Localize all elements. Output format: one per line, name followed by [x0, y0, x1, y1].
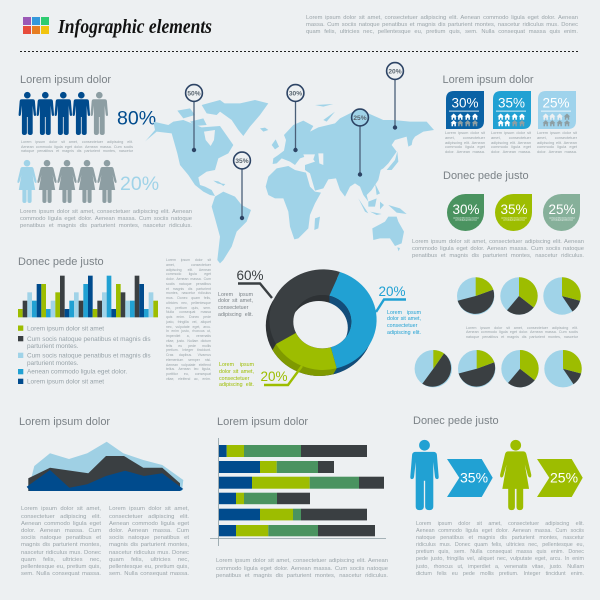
text column left — [21, 506, 101, 579]
drop: 25%: commodo ligula eget dolor aenean — [551, 218, 573, 222]
20% green label: adipiscing elit. — [219, 382, 254, 388]
heading: Lorem ipsum dolor — [217, 416, 308, 428]
drops caption: Lorem ipsum dolor sit amet, consectetuer adipiscing elit. Aenean — [412, 239, 584, 245]
drop: 30%: commodo ligula eget dolor aenean — [455, 218, 477, 222]
caption: pede justo, fringilla vel, aliquet nec, vulputate eget, arcu. In enim — [416, 556, 584, 562]
text column left: magnis dis parturient montes, — [21, 542, 101, 548]
men caption — [21, 140, 133, 155]
caption: justo, rhoncus ut, imperdiet a, venenatis vitae, justo. Nullam — [416, 564, 584, 570]
men caption: Lorem ipsum dolor sit amet, consectetuer adipiscing elit. — [21, 140, 133, 144]
arrow: 35% — [447, 459, 493, 497]
women caption — [20, 209, 192, 232]
card caption 2 — [491, 131, 531, 156]
narrow text column: dolor. Aenean massa. Cum — [166, 277, 211, 281]
intro text: quam felis, ultricies nec, pellentesque eu, pretium quis, sem. Nulla consequat massa quis enim. — [306, 29, 578, 35]
narrow text column — [166, 258, 211, 383]
text column left: dolor. Aenean massa. Cum — [21, 528, 101, 534]
20% blue label: 20% — [378, 284, 406, 299]
drop: 25% — [543, 194, 580, 231]
stacked bar chart — [210, 438, 386, 546]
panel: pie charts — [415, 277, 582, 387]
card caption 3: amet, consectetuer — [537, 135, 577, 140]
pin: 25% — [352, 109, 368, 177]
narrow text column: sociis natoque penatibus — [166, 282, 211, 286]
panel: area chart — [19, 416, 189, 579]
drop: 30%: Lorem ipsum dolor sit amet, consectetuer — [453, 216, 479, 220]
narrow text column: Cras dapibus. Vivamus — [166, 353, 211, 357]
americas — [145, 100, 268, 263]
narrow text column: vitae, eleifend ac, enim. — [166, 377, 211, 381]
pin: 30% — [287, 85, 304, 152]
narrow text column: tellus. Aenean leo ligula, — [166, 367, 211, 371]
text column right: quam felis, ultricies nec, — [109, 557, 189, 563]
card: 35%: 35% — [498, 96, 525, 111]
text column right: Aenean commodo ligula eget — [109, 521, 189, 527]
drop: 25%: 25% — [548, 202, 576, 217]
heading: Donec pede justo — [18, 256, 104, 268]
drop: 35% — [495, 194, 532, 231]
pie row top — [457, 277, 581, 315]
text column left: pellentesque eu, pretium quis, — [21, 564, 101, 570]
heading: Donec pede justo — [443, 170, 529, 182]
20% green label: dolor sit amet, — [219, 369, 254, 375]
narrow text column: Nulla consequat massa — [166, 310, 211, 314]
intro text — [306, 15, 578, 38]
legend: Lorem ipsum dolor sit amet — [27, 326, 104, 333]
60% label: Lorem ipsum — [218, 292, 253, 298]
narrow text column: Aenean vulputate eleifend — [166, 362, 211, 366]
text column right: consectetuer adipiscing elit. — [109, 514, 189, 520]
pie caption: Aenean commodo ligula eget dolor. Aenean massa. Cum sociis — [466, 330, 578, 334]
drops caption: commodo ligula eget dolor. Aenean massa. Cum sociis natoque — [412, 246, 584, 252]
header — [23, 15, 578, 38]
panel: gender split — [410, 415, 584, 581]
card caption 3: dolor. Aenean massa. — [537, 149, 577, 154]
legend — [18, 326, 151, 386]
drop: 35%: commodo ligula eget dolor aenean — [503, 218, 525, 222]
narrow text column: elementum semper nisi. — [166, 358, 211, 362]
narrow text column: imperdiet a, venenatis — [166, 334, 211, 338]
drop: 35%: 35% — [500, 202, 528, 217]
women caption: Lorem ipsum dolor sit amet, consectetuer adipiscing elit. Aenean — [20, 209, 192, 215]
heading: Donec pede justo — [413, 415, 499, 427]
60% label: consectetuer — [218, 305, 248, 311]
legend: parturient montes. — [27, 360, 79, 367]
panel: stacked bars — [210, 416, 388, 581]
narrow text column: amet, consectetuer — [166, 263, 211, 267]
caption: pretium quis, sem. Nulla consequat massa quis enim. Donec — [416, 549, 584, 555]
panel: people percentages — [17, 74, 192, 232]
80% value: 80% — [117, 108, 156, 130]
text column left: Lorem ipsum dolor sit amet, — [21, 506, 101, 512]
narrow text column: quis enim. Donec pede — [166, 315, 211, 319]
text column left: nascetur ridiculus mus. Donec — [21, 550, 101, 556]
icon: man — [410, 440, 439, 510]
card caption 1: dolor. Aenean massa. — [445, 149, 485, 154]
card caption 3: adipiscing elit. Aenean — [537, 140, 577, 144]
pie row bottom — [415, 350, 582, 387]
donut — [266, 269, 377, 376]
title: Infographic elements — [57, 16, 212, 38]
caption: Lorem ipsum dolor sit amet, consectetuer adipiscing elit. — [416, 521, 584, 527]
20% green label: Lorem ipsum — [219, 362, 254, 368]
text column left: sem. Nulla consequat massa. — [21, 571, 101, 577]
narrow text column: In enim justo, rhoncus ut, — [166, 329, 211, 333]
pin: 35% — [234, 152, 250, 220]
card caption 2: dolor. Aenean massa. — [491, 149, 531, 154]
panel: column chart — [18, 256, 211, 386]
pin: 50% — [186, 85, 202, 152]
pie caption: Lorem ipsum dolor sit amet, consectetuer adipiscing elit. — [466, 326, 578, 330]
caption: dictum felis eu pede mollis pretium. Integer tincidunt enim. — [416, 571, 584, 577]
intro text: Lorem ipsum dolor sit amet, consectetuer adipiscing elit. Aenean commodo ligula eget dolor. Aenean — [306, 15, 578, 21]
text column right: dolor. Aenean massa. Cum — [109, 528, 189, 534]
60% label: dolor sit amet, — [218, 298, 253, 304]
drop: 30%: 30% — [452, 202, 480, 217]
pie caption: natoque penatibus et magnis dis parturient montes, nascetur — [466, 335, 578, 339]
text column right: sem. Nulla consequat massa. — [109, 571, 189, 577]
narrow text column: ultricies nec, pellentesque — [166, 301, 211, 305]
caption — [416, 521, 584, 581]
men caption: Aenean commodo ligula eget dolor. Aenean massa. Cum sociis — [21, 145, 133, 149]
text column right — [109, 506, 189, 579]
20% blue label: Lorem ipsum — [387, 310, 421, 316]
legend: Aenean commodo ligula eget dolor. — [27, 369, 127, 376]
card caption 1: adipiscing elit. Aenean — [445, 140, 485, 144]
area chart — [27, 442, 183, 491]
intro text: massa. Cum sociis natoque penatibus et magnis dis parturient montes, nascetur ridiculus mus. Donec — [306, 22, 578, 28]
20% value: 20% — [120, 173, 159, 195]
60% label: 60% — [236, 268, 264, 283]
narrow text column: Lorem ipsum dolor sit — [166, 258, 211, 262]
text column left: sociis natoque penatibus et — [21, 535, 101, 541]
drops caption — [412, 239, 584, 262]
arrow: 35%: 35% — [460, 470, 488, 486]
card caption 1: amet, consectetuer — [445, 135, 485, 140]
text column right: pellentesque eu, pretium quis, — [109, 564, 189, 570]
drop: 25%: Lorem ipsum dolor sit amet, consectetuer — [549, 216, 575, 220]
text column right: Lorem ipsum dolor sit amet, — [109, 506, 189, 512]
heading: Lorem ipsum dolor — [20, 74, 111, 86]
narrow text column: vitae, justo. Nullam dictum — [166, 339, 211, 343]
20% blue label: dolor sit amet, — [387, 316, 421, 322]
narrow text column: adipiscing elit. Aenean — [166, 268, 211, 272]
card caption 3: commodo ligula eget — [537, 144, 577, 149]
card caption 2: amet, consectetuer — [491, 135, 531, 140]
20% green label: 20% — [260, 369, 288, 384]
pie caption — [466, 326, 578, 341]
text column left: quam felis, ultricies nec, — [21, 557, 101, 563]
card caption 1 — [445, 131, 485, 156]
20% green label: consectetuer — [219, 376, 249, 382]
legend: Lorem ipsum dolor sit amet — [27, 379, 104, 386]
20% blue label — [376, 284, 421, 338]
legend: Cum socis natoque penatibus et magnis dis — [27, 353, 151, 360]
drop: 35%: Lorem ipsum dolor sit amet, consectetuer — [501, 216, 527, 220]
20% blue label: adipiscing elit. — [387, 330, 421, 336]
drop: 30% — [447, 194, 484, 231]
narrow text column: felis eu pede mollis — [166, 344, 211, 348]
narrow text column: montes, nascetur ridiculus — [166, 291, 211, 295]
narrow text column: nec, vulputate eget, arcu. — [166, 324, 211, 328]
caption: ridiculus mus. Donec quam felis, ultricies nec, pellentesque eu, — [416, 542, 584, 548]
card caption 1: commodo ligula eget — [445, 144, 485, 149]
caption: penatibus et magnis dis parturient montes, nascetur ridiculus. — [216, 573, 388, 579]
heading: Lorem ipsum dolor — [19, 416, 110, 428]
old world — [260, 104, 434, 251]
narrow text column: et magnis dis parturient — [166, 286, 211, 290]
60% label: adipiscing elit. — [218, 312, 253, 318]
text column right: nascetur ridiculus mus. Donec — [109, 550, 189, 556]
caption: commodo ligula eget dolor. Aenean massa. Cum sociis natoque — [216, 566, 388, 572]
world map — [145, 63, 434, 263]
women pictogram row — [17, 160, 117, 203]
narrow text column: justo, fringilla vel, aliquet — [166, 320, 211, 324]
card caption 2: adipiscing elit. Aenean — [491, 140, 531, 144]
narrow text column: mus. Donec quam felis, — [166, 296, 211, 300]
20% blue label: consectetuer — [387, 323, 417, 329]
narrow text column: pretium. Integer tincidunt. — [166, 348, 211, 352]
men pictogram row — [19, 92, 108, 135]
60% label — [218, 268, 272, 320]
card: 25%: 25% — [542, 96, 570, 111]
panel: percentage drops — [412, 170, 584, 262]
panel: rating cards — [442, 74, 577, 156]
pin: 50%: 50% — [187, 90, 201, 98]
text column left: Aenean commodo ligula eget — [21, 521, 101, 527]
legend: parturient montes. — [27, 343, 79, 350]
pin: 35%: 35% — [235, 158, 249, 165]
women caption: penatibus et magnis dis parturient montes, nascetur ridiculus. — [20, 223, 192, 229]
text column right: magnis dis parturient montes, — [109, 542, 189, 548]
20% green label — [219, 362, 302, 390]
text column right: sociis natoque penatibus et — [109, 535, 189, 541]
pin: 25%: 25% — [353, 115, 367, 122]
arrow: 25%: 25% — [550, 470, 578, 486]
column chart bars — [18, 276, 158, 317]
card caption 2: commodo ligula eget — [491, 144, 531, 149]
pin: 20% — [387, 63, 403, 130]
narrow text column: commodo ligula eget — [166, 272, 211, 276]
caption: Aenean commodo ligula eget dolor. Aenean massa. Cum sociis — [416, 528, 584, 534]
pin: 30%: 30% — [289, 90, 302, 98]
panel: donut chart — [218, 268, 421, 390]
caption — [216, 558, 388, 581]
drops caption: penatibus et magnis dis parturient montes, nascetur ridiculus. — [412, 253, 584, 259]
heading: Lorem ipsum dolor — [442, 74, 534, 86]
icon: colour squares — [23, 17, 49, 34]
caption: natoque penatibus et magnis dis parturient montes, nascetur — [416, 535, 584, 541]
icon: woman — [500, 440, 531, 510]
narrow text column: porttitor eu, consequat — [166, 372, 211, 376]
card caption 3 — [537, 131, 577, 156]
women caption: commodo ligula eget dolor. Aenean massa. Cum sociis natoque — [20, 216, 192, 222]
caption: Lorem ipsum dolor sit amet, consectetuer adipiscing elit. Aenean — [216, 558, 388, 564]
men caption: natoque penatibus et magnis dis parturient montes, nascetur — [21, 149, 133, 153]
pin: 20%: 20% — [388, 68, 402, 76]
arrow: 25% — [537, 459, 583, 497]
text column left: consectetuer adipiscing elit. — [21, 514, 101, 520]
legend: Cum socis natoque penatibus et magnis dis — [27, 336, 151, 343]
narrow text column: eu, pretium quis, sem. — [166, 306, 211, 310]
card: 30%: 30% — [451, 96, 479, 111]
